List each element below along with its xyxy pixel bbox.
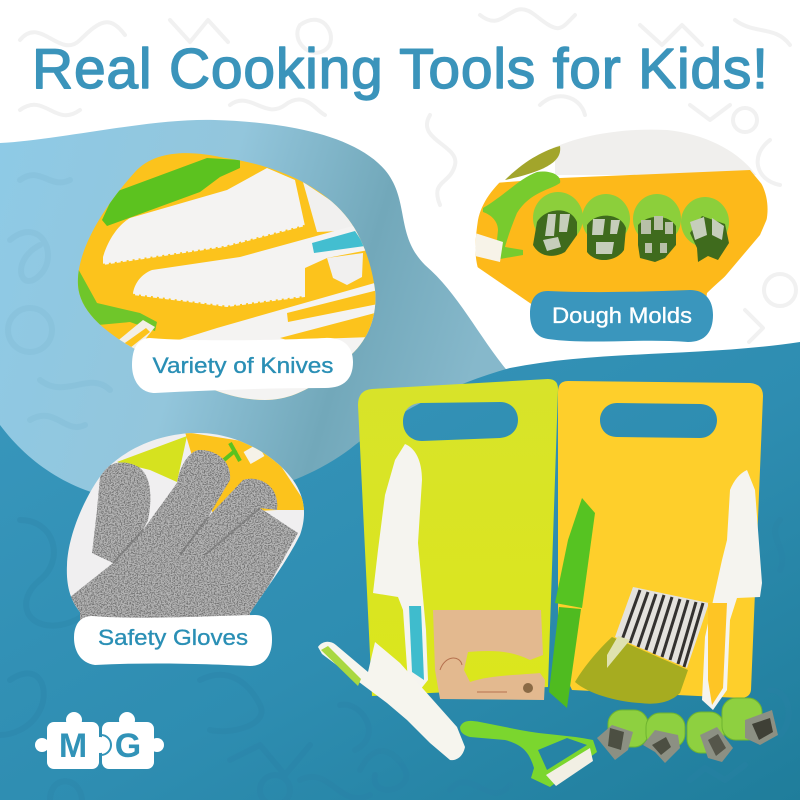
photo: kids cooking tool set (318, 379, 778, 787)
wooden knife (433, 610, 545, 700)
title: Real Cooking Tools for Kids! (32, 37, 768, 101)
label: dough molds: Dough Molds (552, 303, 692, 328)
crinkle cutter blade (615, 587, 709, 668)
medium white knife (133, 224, 368, 307)
logo: MG puzzle pieces (35, 712, 164, 769)
vegetable cutter 1 (597, 710, 648, 760)
panel: light blue wave (0, 120, 515, 560)
photo: dough molds (475, 130, 768, 304)
logo: MG puzzle pieces: M (59, 727, 87, 765)
photo: safety gloves (60, 430, 310, 625)
label: dough molds (530, 290, 713, 342)
white knife with teal handle (373, 444, 428, 690)
logo: MG puzzle pieces: G (115, 727, 141, 765)
white knife with yellow handle (702, 470, 762, 710)
label: variety of knives: Variety of Knives (152, 353, 334, 378)
glove (60, 450, 298, 625)
white knife with green handle, front (318, 642, 465, 760)
green cutting board (358, 379, 558, 696)
small white knife (179, 283, 376, 400)
yellow cutting board (558, 381, 763, 698)
vegetable cutter 4 (722, 698, 778, 745)
green knife (102, 158, 240, 226)
cutter 4 (681, 197, 729, 262)
peeler (483, 172, 560, 259)
large white knife (103, 168, 305, 265)
cutter 3 (633, 194, 681, 262)
green knife (549, 498, 595, 708)
label: safety gloves: Safety Gloves (98, 625, 248, 650)
yellow board (470, 170, 775, 310)
crinkle cutter handle (575, 636, 688, 704)
photo: variety of knives (78, 153, 376, 400)
label: safety gloves (74, 615, 272, 666)
panel: deep blue wave (0, 342, 800, 800)
cutter 2 (582, 194, 630, 260)
vegetable cutter 2 (643, 713, 685, 763)
vegetable peeler (460, 721, 597, 787)
label: variety of knives (132, 338, 353, 393)
green peeler (78, 270, 157, 331)
vegetable cutter 3 (687, 712, 733, 762)
cutter 1 (533, 192, 583, 256)
